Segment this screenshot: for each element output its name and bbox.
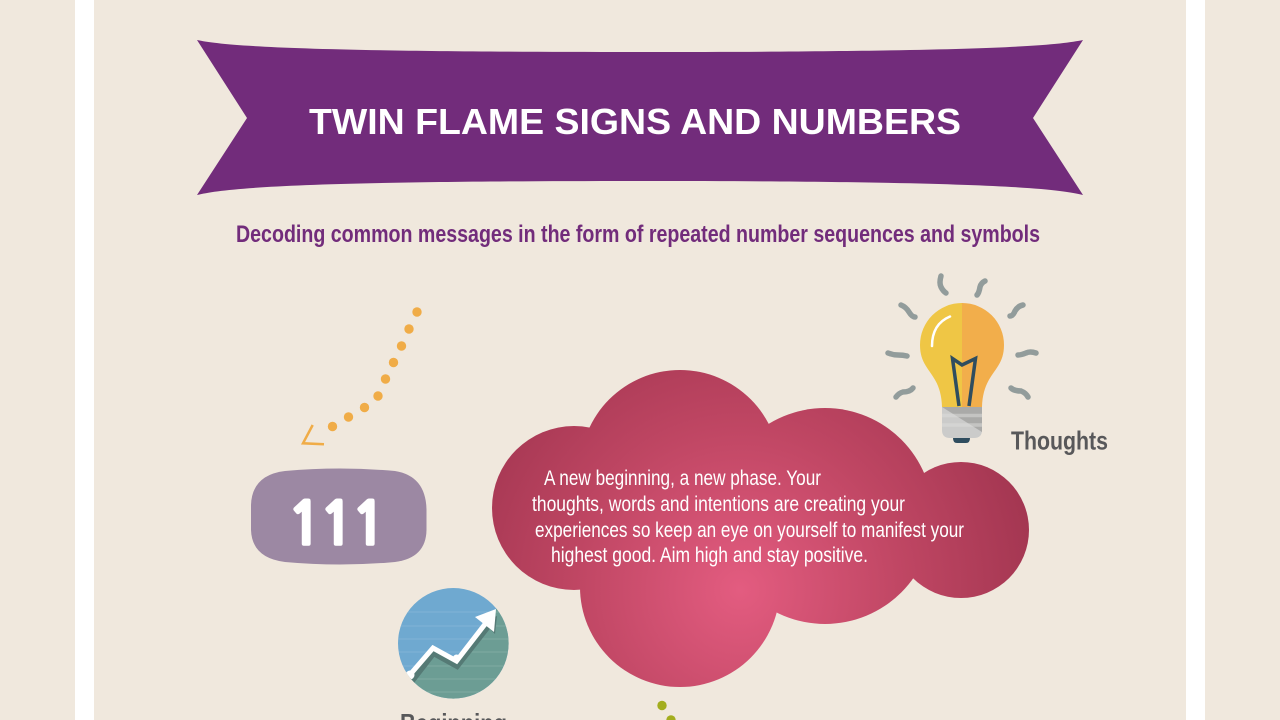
message text: thoughts, words and intentions are creating your <box>532 493 905 516</box>
icon: light bulb <box>888 276 1036 443</box>
arrow: dotted green arrow <box>657 701 676 720</box>
icon: growth chart <box>398 588 509 699</box>
title: TWIN FLAME SIGNS AND NUMBERS <box>309 101 961 142</box>
subtitle: Decoding common messages in the form of repeated number sequences and symbols <box>236 221 1040 248</box>
message text: A new beginning, a new phase. Your <box>544 467 821 490</box>
title banner <box>197 40 1083 195</box>
message text: highest good. Aim high and stay positive. <box>551 544 868 567</box>
message text: experiences so keep an eye on yourself to manifest your <box>535 519 964 542</box>
number badge: 111 <box>251 468 426 564</box>
label: Thoughts: Thoughts <box>1011 426 1108 456</box>
arrow: dotted orange arrow to 111 <box>303 307 422 444</box>
panel: message cloud <box>492 370 1029 687</box>
message text <box>532 467 964 567</box>
number 111: 111 <box>287 494 387 554</box>
